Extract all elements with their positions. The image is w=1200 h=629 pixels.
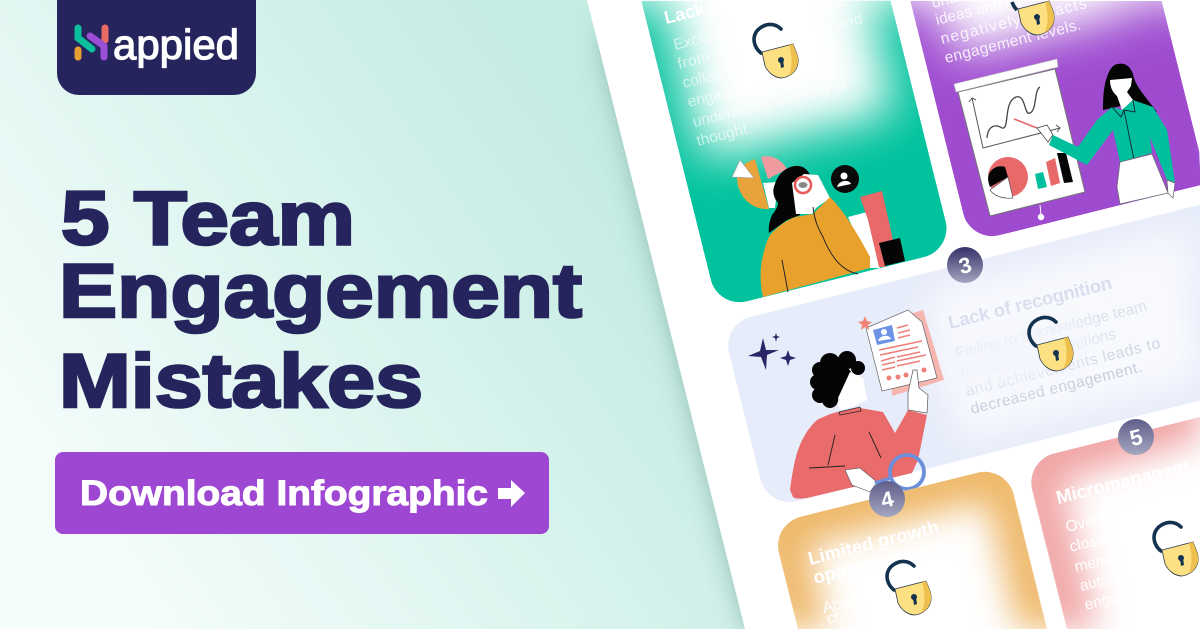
download button [55,452,549,534]
card 1 text [662,0,864,150]
card 5 text: members limits [1073,534,1178,576]
title: 5 Team [61,176,355,262]
number badge 5: 5 [1127,424,1145,451]
card 3 body text: recognize contributions [959,326,1118,381]
number badge 3: 3 [956,252,974,279]
logo wordmark: appied [113,21,239,68]
card 3 illustration: sparkles [748,333,796,370]
card 3 body text [954,298,1162,418]
card 5 text: Overly controlling [1064,490,1184,536]
logo badge [57,0,256,95]
card 4 text: opportunities [811,539,931,588]
title: Mistakes [59,339,423,424]
card 3 body text: Failing to acknowledge team [954,298,1149,362]
tilted white infographic sheet [587,0,1200,629]
card 4 text: Limited growth [806,516,941,569]
card 5: micromanagement (red) [1031,417,1200,629]
card 3 heading: Lack of recognition [946,272,1114,333]
number badge 4: 4 [878,486,897,513]
card 1 text: collaboration reduces [681,40,828,92]
number badge 3 [947,247,983,283]
card 2 text: engagement levels. [943,17,1083,67]
download button: Download Infographic [80,474,488,513]
card 3: lack of recognition [722,205,1200,508]
lock icon 2 [1012,1,1054,35]
card 1: lack of inclusion (green) [641,0,946,302]
card 2 illustration: presentation board [954,59,1175,220]
card 3 body text: decreased engagement. [969,359,1144,418]
card 3 illustration: woman pointing [790,351,928,499]
card 5 text: autonomy and [1078,555,1177,595]
card 1 illustration: woman with magnifier [732,156,905,297]
card 2 text [930,0,1089,67]
title: Engagement [59,249,582,334]
panel shadow [603,0,800,629]
lock icon 5 [1154,522,1198,576]
card 1 text: thought. [695,120,753,150]
card 4 text [806,516,941,628]
card 5 text [1054,455,1191,614]
card 4: limited growth opportunities (orange) [778,472,1047,629]
card 1 text: from decision-making and [676,10,864,73]
card 5 text: close monitoring [1068,512,1181,556]
lock icon 1 [754,24,798,78]
card 3 illustration: resume document [858,310,944,396]
logo mark [78,28,105,57]
card 4 text: Absence of [821,581,901,617]
card 2: purple [910,0,1200,236]
lock icon 4 [887,561,931,615]
card 5 text: Micromanagem [1054,455,1191,508]
lock icon 3 [1029,317,1073,371]
arrow icon [498,480,525,507]
card 5 text: engagement [1083,576,1171,614]
number badge 5 [1118,419,1154,455]
card 1 text: engagement and [686,66,803,111]
card 4 text: ch [825,607,845,628]
number badge 4 [869,481,905,517]
title [59,176,582,424]
card 1 text: undermines diversity of [691,76,850,131]
card 3 body text: and achievements leads to [964,335,1162,400]
